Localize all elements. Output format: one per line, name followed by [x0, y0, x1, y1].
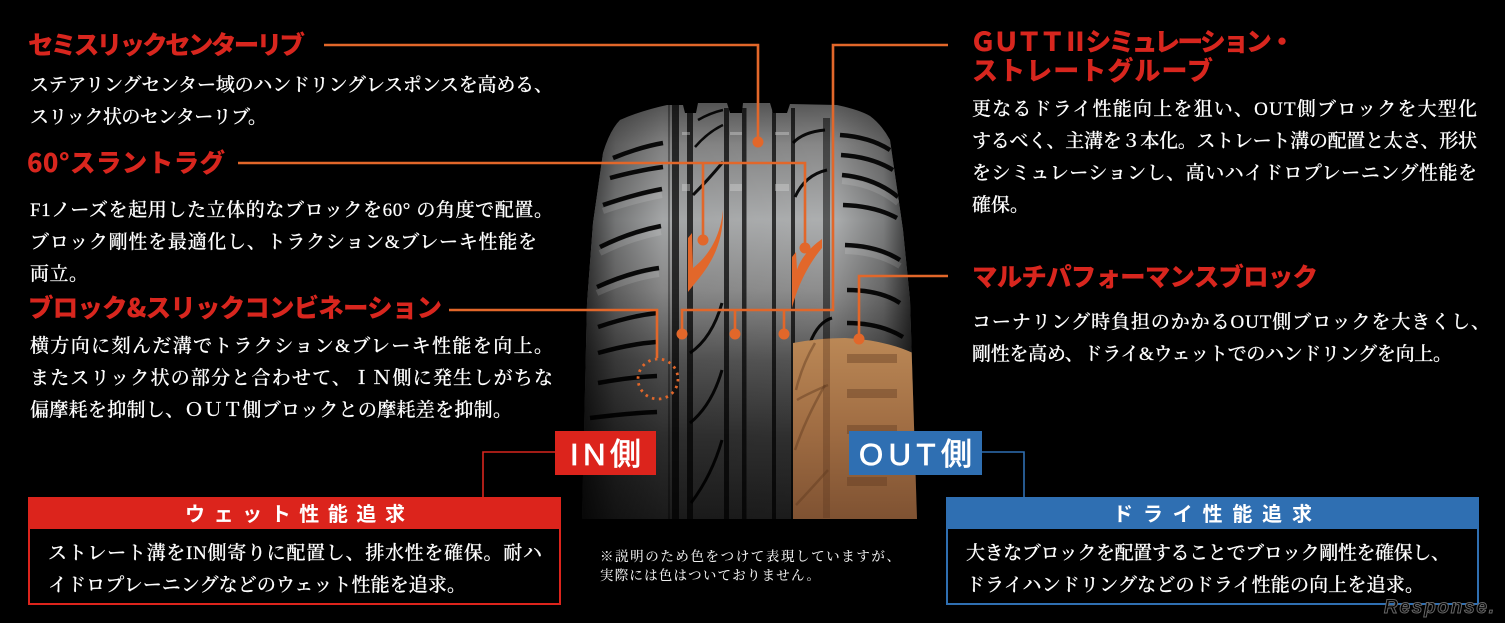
panel: dry performance: ドライハンドリングなどのドライ性能の向上を追求。 — [966, 574, 1424, 596]
text block: GUTT II simulation straight groove: をシミュレーションし、高いハイドロプレーニング性能を — [972, 162, 1477, 184]
text block: block and slick combination: またスリック状の部分と合わせて、ＩＮ側に発生しがちな — [30, 367, 553, 389]
text block: 60 degree slant lug — [27, 143, 553, 285]
panel: wet performance: ストレート溝をIN側寄りに配置し、排水性を確保。耐ハ — [48, 542, 542, 564]
leader: GUTT II straight groove — [676, 45, 948, 340]
note: 実際には色はついておりません。 — [600, 567, 820, 583]
text block: 60 degree slant lug: 両立。 — [30, 263, 88, 285]
panel: wet performance: ウェット性能追求 — [185, 503, 405, 526]
IN side label — [483, 431, 656, 497]
note — [600, 549, 900, 583]
text block: GUTT II simulation straight groove: ＧＵＴＴⅡシミュレーション・ — [970, 22, 1295, 59]
text block: GUTT II simulation straight groove — [970, 22, 1477, 216]
OUT side label — [849, 431, 1024, 497]
tire illustration — [580, 100, 920, 520]
leader: block and slick combination — [449, 310, 678, 399]
orange highlighted OUT-side block area — [793, 338, 918, 519]
OUT side label: OUT側 — [859, 437, 972, 472]
panel: dry performance: ドライ性能追求 — [1113, 503, 1312, 526]
text block: semi-slick center rib: セミスリックセンターリブ — [28, 25, 305, 62]
watermark: Response. — [1384, 597, 1494, 618]
text block: block and slick combination: ブロック&スリックコンビネーション — [28, 288, 442, 325]
text block: block and slick combination — [28, 288, 553, 421]
text block: semi-slick center rib: スリック状のセンターリブ。 — [30, 106, 267, 128]
IN side label: IN側 — [570, 437, 641, 472]
note: ※説明のため色をつけて表現していますが、 — [600, 549, 900, 564]
text block: semi-slick center rib — [28, 25, 553, 128]
text block: 60 degree slant lug: F1ノーズを起用した立体的なブロックを60° の角度で配置。 — [30, 199, 553, 221]
text block: GUTT II simulation straight groove: 更なるドライ性能向上を狙い、OUT側ブロックを大型化 — [972, 98, 1477, 120]
text block: GUTT II simulation straight groove: 確保。 — [972, 194, 1029, 216]
text block: multi performance block: マルチパフォーマンスブロック — [972, 257, 1318, 294]
text block: GUTT II simulation straight groove: するべく、主溝を３本化。ストレート溝の配置と太さ、形状 — [972, 130, 1477, 152]
text block: block and slick combination: 横方向に刻んだ溝でトラクション&ブレーキ性能を向上。 — [30, 335, 553, 357]
text block: GUTT II simulation straight groove: ストレートグルーブ — [972, 51, 1213, 88]
leader: 60 degree slant lug — [238, 163, 810, 254]
text block: semi-slick center rib: ステアリングセンター域のハンドリングレスポンスを高める、 — [30, 74, 553, 96]
text block: 60 degree slant lug: 60°スラントラグ — [27, 143, 225, 180]
leader: semi-slick center rib — [324, 45, 764, 148]
text block: block and slick combination: 偏摩耗を抑制し、ＯＵＴ側ブロックとの摩耗差を抑制。 — [30, 399, 512, 421]
text block: multi performance block: コーナリング時負担のかかるOUT側ブロックを大きくし、 — [972, 311, 1490, 333]
panel: wet performance — [28, 497, 561, 604]
leader: multi performance block — [854, 276, 948, 344]
text block: multi performance block: 剛性を高め、ドライ&ウェットでのハンドリングを向上。 — [972, 343, 1452, 365]
text block: 60 degree slant lug: ブロック剛性を最適化し、トラクション&ブレーキ性能を — [30, 231, 537, 253]
panel: dry performance: 大きなブロックを配置することでブロック剛性を確保し、 — [966, 542, 1450, 564]
text block: multi performance block — [972, 257, 1490, 365]
slant lug highlight shapes — [688, 210, 822, 308]
panel: wet performance: イドロプレーニングなどのウェット性能を追求。 — [48, 574, 466, 596]
panel: dry performance — [947, 497, 1479, 604]
